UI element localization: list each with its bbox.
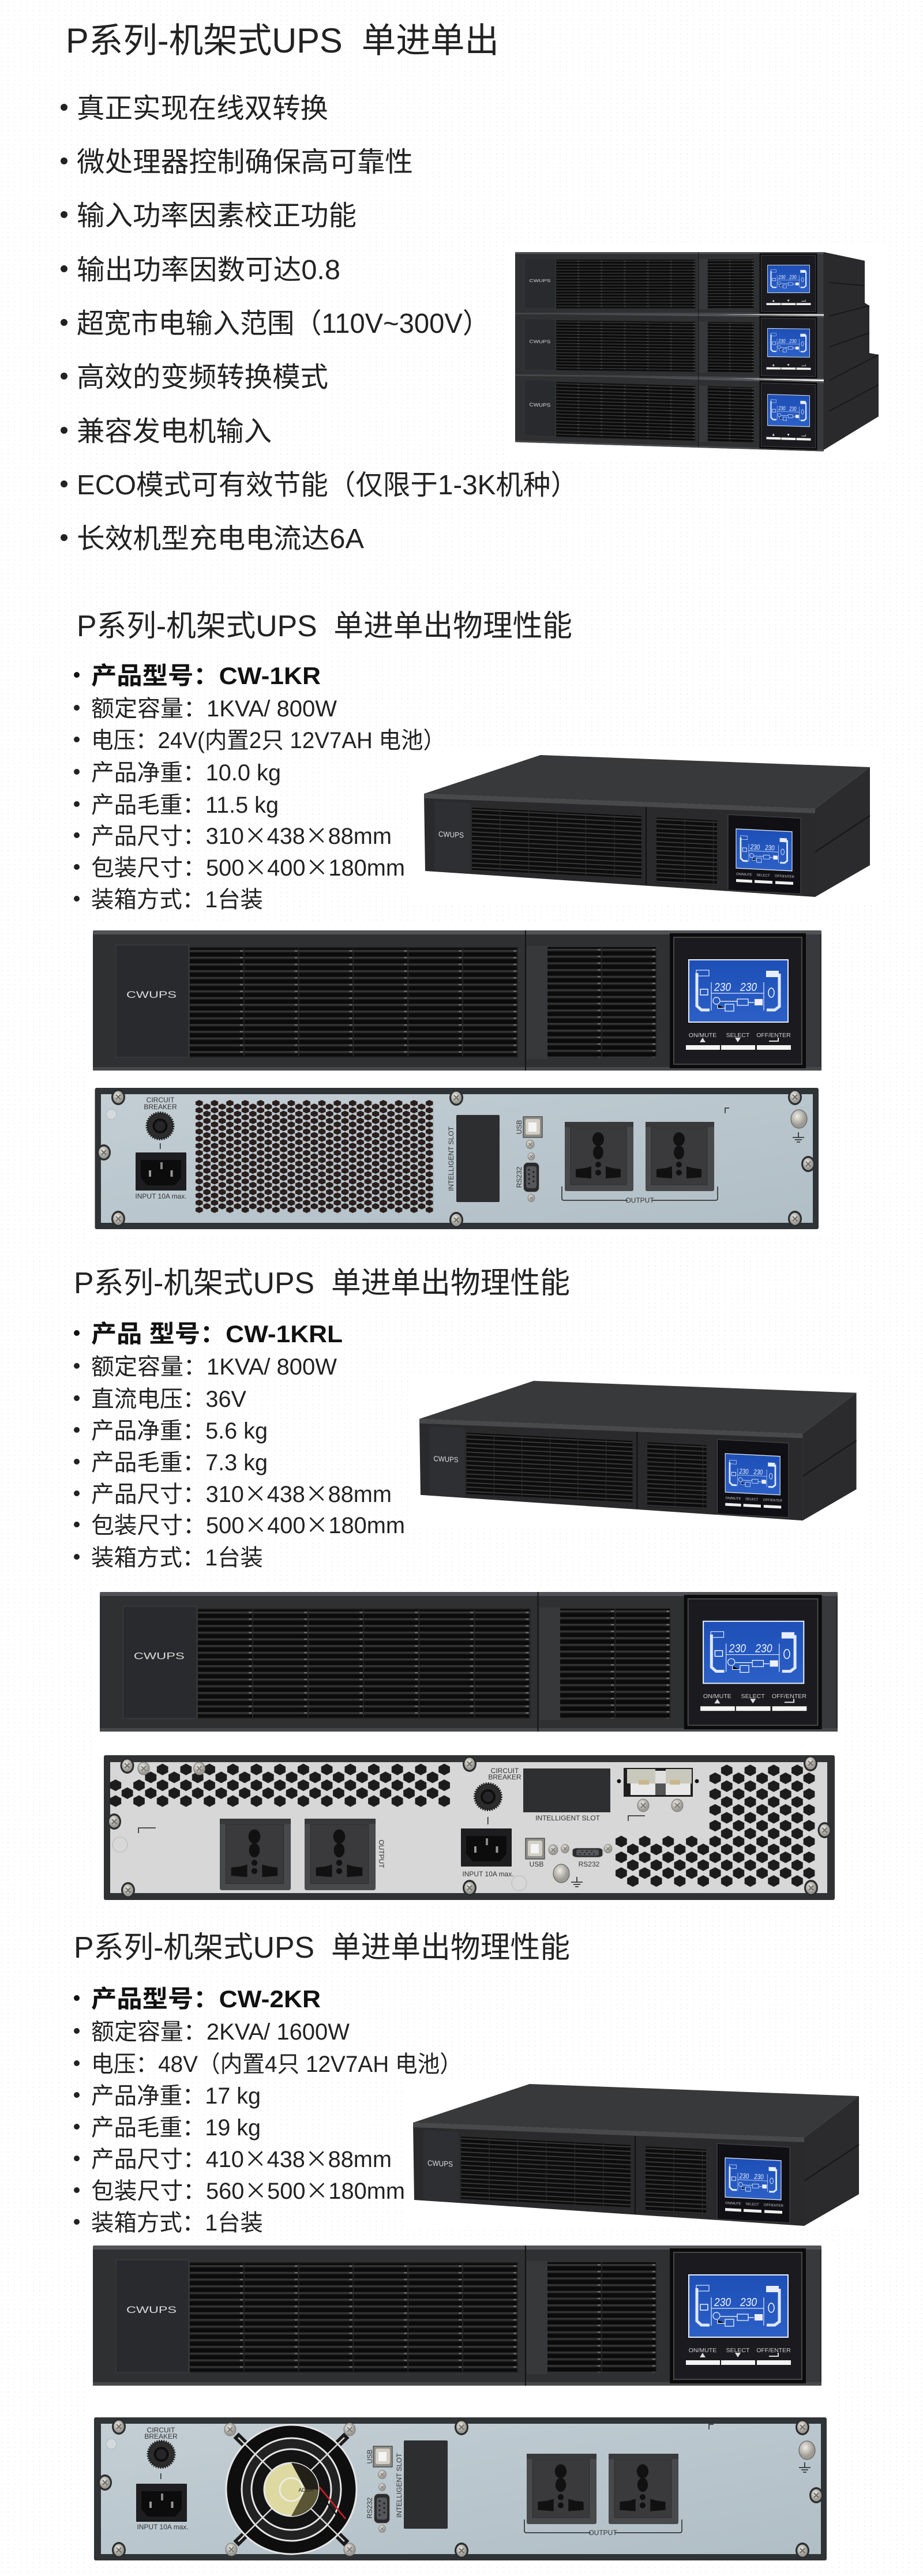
rear panel: CW-1KRL: USB bbox=[530, 1860, 543, 1868]
rear panel: CW-1KR bbox=[95, 1088, 819, 1229]
feature: 输出功率因数可达0.8: 输出功率因数可达0.8 bbox=[77, 255, 340, 286]
product photo: CW-1KRL isometric view: 230 bbox=[753, 1468, 763, 1477]
front panel: CW-1KRL: OFF/ENTER bbox=[772, 1693, 806, 1700]
product photo: CW-1KRL isometric view: ON/MUTE bbox=[725, 1497, 741, 1501]
rear panel: CW-1KR: OUTPUT bbox=[625, 1196, 654, 1204]
front panel: CW-2KR: OFF/ENTER bbox=[756, 2347, 791, 2354]
product photo: three stacked UPS units: 230 bbox=[778, 405, 786, 412]
product photo: CW-1KRL isometric view bbox=[419, 1381, 857, 1520]
front panel: CW-1KR: OFF/ENTER bbox=[756, 1032, 791, 1039]
front panel: CW-2KR: 230 bbox=[714, 2296, 731, 2309]
feature: 真正实现在线双转换: 真正实现在线双转换 bbox=[77, 93, 328, 124]
product photo: CW-1KR isometric view: 230 bbox=[764, 843, 775, 853]
icon: cooling fan: ADDA bbox=[298, 2487, 313, 2493]
feature list bbox=[61, 93, 578, 554]
rear panel: CW-1KRL: CIRCUIT bbox=[491, 1767, 519, 1775]
rear panel: CW-2KR: BREAKER bbox=[144, 2432, 178, 2440]
product photo: CW-2KR isometric view bbox=[413, 2084, 859, 2226]
feature: 高效的变频转换模式: 高效的变频转换模式 bbox=[77, 362, 328, 393]
product photo: CW-1KR isometric view: 230 bbox=[750, 843, 760, 851]
front panel: CW-1KRL bbox=[100, 1592, 838, 1732]
product photo: three stacked UPS units: 230 bbox=[789, 338, 797, 344]
spec list: CW-1KR: 产品型号：CW-1KR bbox=[91, 662, 321, 689]
feature: ECO模式: ECO模式可有效节能（仅限于1-3K机种） bbox=[77, 470, 578, 501]
spec list: CW-1KRL: 额定容量：1KVA/ 800W bbox=[91, 1354, 337, 1380]
product photo: CW-2KR isometric view: SELECT bbox=[745, 2203, 759, 2207]
rear panel: CW-2KR: INTELLIGENT SLOT bbox=[395, 2453, 403, 2518]
product photo: CW-2KR isometric view: CWUPS bbox=[427, 2158, 453, 2168]
product photo: three stacked UPS units bbox=[515, 252, 879, 452]
rear panel: CW-2KR: INPUT 10A max. bbox=[137, 2523, 189, 2531]
rear panel: CW-1KR: USB bbox=[515, 1120, 523, 1134]
product photo: CW-1KR isometric view: ON/MUTE bbox=[736, 873, 752, 877]
heading: CW-2KR section: P系列-机架式UPS 单进单出物理性能 bbox=[74, 1931, 570, 1965]
product photo: CW-1KRL isometric view: CWUPS bbox=[434, 1454, 459, 1464]
front panel: CW-1KR bbox=[93, 930, 821, 1071]
rear panel: CW-1KR: CIRCUIT bbox=[147, 1096, 175, 1104]
spec list: CW-2KR: 包装尺寸：560×500×180mm bbox=[91, 2172, 405, 2206]
product photo: CW-1KR isometric view bbox=[424, 755, 870, 897]
rear panel: CW-1KR: INPUT 10A max. bbox=[135, 1192, 187, 1200]
spec list: CW-2KR: 产品型号：CW-2KR bbox=[91, 1985, 321, 2012]
spec list: CW-2KR: 产品毛重：19 kg bbox=[91, 2115, 261, 2141]
front panel: CW-1KRL: 230 bbox=[755, 1643, 772, 1655]
rear panel: CW-2KR: USB bbox=[366, 2450, 374, 2464]
front panel: CW-1KR: ON/MUTE bbox=[689, 1032, 716, 1039]
rear panel: CW-1KR: INTELLIGENT SLOT bbox=[447, 1126, 455, 1191]
spec list: CW-1KR: 产品尺寸：310×438×88mm bbox=[91, 817, 392, 851]
product photo: three stacked UPS units: 230 bbox=[778, 274, 786, 280]
spec list: CW-1KRL: 产品尺寸：310×438×88mm bbox=[91, 1475, 392, 1509]
rear panel: CW-2KR bbox=[94, 2417, 827, 2560]
spec list: CW-2KR bbox=[74, 1985, 462, 2236]
front panel: CW-2KR: CWUPS bbox=[126, 2304, 177, 2315]
feature: 超宽市电输入范围: 超宽市电输入范围（110V~300V） bbox=[77, 309, 490, 339]
rear panel: CW-1KRL: INPUT 10A max. bbox=[462, 1870, 514, 1878]
feature: 微处理器控制确保高可靠性: 微处理器控制确保高可靠性 bbox=[77, 147, 413, 178]
heading: CW-1KR section: P系列-机架式UPS 单进单出物理性能 bbox=[77, 610, 572, 643]
heading: CW-1KRL section: P系列-机架式UPS 单进单出物理性能 bbox=[74, 1267, 570, 1300]
front panel: CW-1KR: CWUPS bbox=[126, 989, 177, 1000]
product photo: CW-2KR isometric view: 230 bbox=[739, 2172, 749, 2180]
product photo: CW-1KRL isometric view: SELECT bbox=[745, 1497, 759, 1502]
spec list: CW-1KR: 电压：24V(内置2只 12V7AH 电池） bbox=[91, 728, 445, 753]
spec list: CW-1KR: 包装尺寸：500×400×180mm bbox=[91, 849, 405, 883]
spec list: CW-1KR: 额定容量：1KVA/ 800W bbox=[91, 696, 337, 722]
spec list: CW-1KRL: 产品 型号：CW-1KRL bbox=[91, 1320, 343, 1347]
spec list: CW-2KR: 产品净重：17 kg bbox=[91, 2083, 261, 2109]
product photo: three stacked UPS units: CWUPS bbox=[530, 278, 551, 283]
front panel: CW-1KR: SELECT bbox=[726, 1032, 750, 1039]
spec list: CW-2KR: 电压：48V（内置4只 12V7AH 电池） bbox=[91, 2052, 462, 2077]
spec list: CW-1KRL bbox=[74, 1320, 405, 1571]
product photo: CW-1KR isometric view: CWUPS bbox=[438, 829, 464, 839]
product photo: CW-1KRL isometric view: 230 bbox=[739, 1467, 749, 1476]
product photo: CW-2KR isometric view: ON/MUTE bbox=[725, 2202, 741, 2206]
rear panel: CW-1KRL: INTELLIGENT SLOT bbox=[535, 1814, 601, 1822]
product photo: three stacked UPS units: CWUPS bbox=[530, 402, 550, 408]
feature: 输入功率因素校正功能: 输入功率因素校正功能 bbox=[77, 201, 357, 231]
spec list: CW-1KRL: 产品净重：5.6 kg bbox=[91, 1418, 268, 1444]
spec list: CW-1KRL: 直流电压：36V bbox=[91, 1387, 246, 1412]
front panel: CW-2KR bbox=[93, 2245, 821, 2386]
spec list: CW-1KR: 装箱方式：1台装 bbox=[91, 887, 263, 913]
product photo: CW-2KR isometric view: 230 bbox=[753, 2172, 764, 2181]
product photo: CW-1KRL isometric view: OFF/ENTER bbox=[763, 1499, 782, 1503]
rear panel: CW-1KRL: RS232 bbox=[579, 1860, 600, 1868]
spec list: CW-1KR: 产品净重：10.0 kg bbox=[91, 760, 281, 786]
product photo: three stacked UPS units: 230 bbox=[789, 274, 797, 280]
front panel: CW-1KRL: 230 bbox=[729, 1643, 746, 1655]
spec list: CW-1KRL: 装箱方式：1台装 bbox=[91, 1545, 263, 1571]
spec list: CW-2KR: 额定容量：2KVA/ 1600W bbox=[91, 2019, 350, 2045]
rear panel: CW-2KR: RS232 bbox=[366, 2497, 374, 2518]
front panel: CW-2KR: 230 bbox=[740, 2296, 757, 2309]
icon: cooling fan bbox=[226, 2425, 357, 2554]
spec list: CW-2KR: 产品尺寸：410×438×88mm bbox=[91, 2141, 392, 2174]
front panel: CW-1KR: 230 bbox=[740, 981, 757, 994]
product photo: CW-2KR isometric view: OFF/ENTER bbox=[764, 2203, 784, 2208]
front panel: CW-2KR: ON/MUTE bbox=[689, 2347, 716, 2354]
spec list: CW-1KR: 产品毛重：11.5 kg bbox=[91, 793, 279, 818]
feature: 长效机型充电电流达6A: 长效机型充电电流达6A bbox=[77, 524, 364, 554]
rear panel: CW-1KR: BREAKER bbox=[144, 1103, 177, 1111]
title: P系列-机架式UPS 单进单出 bbox=[66, 21, 499, 60]
rear panel: CW-1KR: RS232 bbox=[515, 1166, 523, 1188]
spec list: CW-1KR bbox=[74, 662, 445, 913]
front panel: CW-1KRL: ON/MUTE bbox=[703, 1693, 731, 1700]
product photo: three stacked UPS units: 230 bbox=[778, 338, 786, 344]
front panel: CW-1KRL: SELECT bbox=[741, 1693, 765, 1700]
feature: 兼容发电机输入: 兼容发电机输入 bbox=[77, 416, 272, 447]
front panel: CW-1KRL: CWUPS bbox=[134, 1651, 185, 1661]
rear panel: CW-2KR: CIRCUIT bbox=[147, 2426, 175, 2434]
rear panel: CW-2KR: OUTPUT bbox=[588, 2529, 617, 2537]
front panel: CW-2KR: SELECT bbox=[726, 2347, 750, 2354]
product photo: three stacked UPS units: 230 bbox=[789, 405, 797, 412]
rear panel: CW-1KRL: BREAKER bbox=[488, 1773, 521, 1781]
rear panel: CW-1KRL bbox=[104, 1755, 835, 1900]
rear panel: CW-1KRL: OUTPUT bbox=[377, 1839, 385, 1868]
spec list: CW-1KRL: 包装尺寸：500×400×180mm bbox=[91, 1507, 405, 1540]
spec list: CW-1KRL: 产品毛重：7.3 kg bbox=[91, 1450, 268, 1475]
product photo: CW-1KR isometric view: SELECT bbox=[756, 874, 770, 878]
spec list: CW-2KR: 装箱方式：1台装 bbox=[91, 2210, 263, 2236]
product photo: three stacked UPS units: CWUPS bbox=[530, 339, 550, 344]
front panel: CW-1KR: 230 bbox=[714, 981, 731, 994]
product photo: CW-1KR isometric view: OFF/ENTER bbox=[775, 874, 795, 879]
